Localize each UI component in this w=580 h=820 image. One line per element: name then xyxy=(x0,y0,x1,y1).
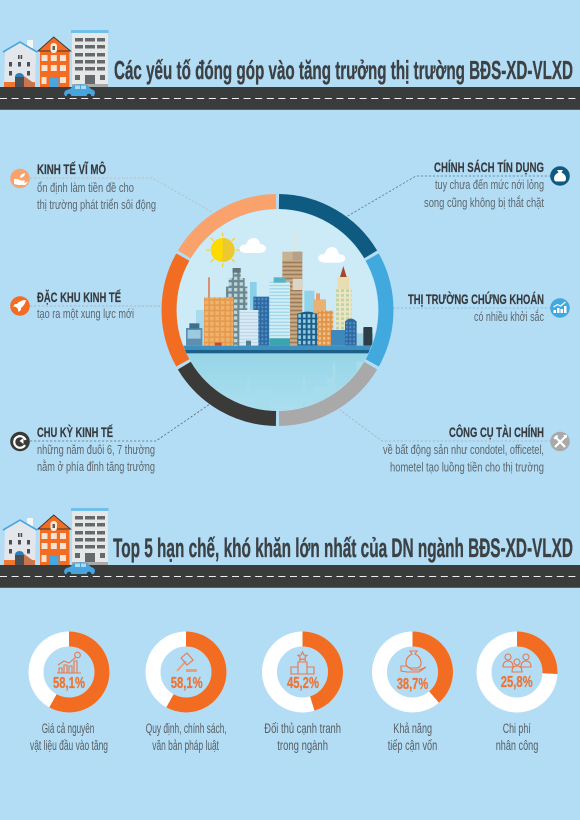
block: Thị trường chứng khoán: có nhiều khởi sắc xyxy=(474,309,544,324)
block: Thị trường chứng khoán xyxy=(408,292,544,324)
caption 3: trong ngành xyxy=(277,738,328,753)
blue building xyxy=(253,297,269,346)
icon: rocket xyxy=(10,296,30,316)
caption 2: Quy định, chính sách, xyxy=(146,721,227,736)
icon: chart with coin xyxy=(57,652,81,673)
block: Chu kỳ kinh tế: CHU KỲ KINH TẾ xyxy=(37,425,113,440)
caption 5 xyxy=(496,721,538,753)
icon: podium xyxy=(291,652,314,674)
caption 2: văn bản pháp luật xyxy=(152,738,219,753)
icon: gavel xyxy=(177,653,197,672)
caption 5: Chi phí xyxy=(503,721,531,736)
ring segment: bottom right xyxy=(279,366,371,418)
block: Đặc khu kinh tế xyxy=(37,290,134,321)
caption 4 xyxy=(388,721,437,753)
caption 4: Khả năng xyxy=(393,721,432,736)
back buildings xyxy=(196,230,373,346)
ring segment: left xyxy=(169,257,183,363)
block: Công cụ tài chính xyxy=(383,425,544,474)
block: Chu kỳ kinh tế: nằm ở phía đỉnh tăng trưởng xyxy=(37,459,155,474)
ring segment: top left xyxy=(184,202,276,254)
block: Kinh tế vĩ mô: ổn định làm tiền đề cho xyxy=(37,180,134,195)
block: Kinh tế vĩ mô: thị trường phát triển sôi động xyxy=(37,197,156,212)
block: Kinh tế vĩ mô xyxy=(37,162,156,212)
clouds xyxy=(239,238,345,263)
icon: cycle arrow xyxy=(10,432,30,451)
icon: hand with plant xyxy=(10,169,30,188)
block: Chính sách tín dụng xyxy=(424,160,544,210)
donut: 25,8% labour cost xyxy=(484,639,550,705)
caption 3 xyxy=(264,721,341,753)
caption 1: vật liệu đầu vào tăng xyxy=(30,738,108,753)
water and reflection xyxy=(186,352,369,410)
donut: 25,8% labour cost: 25,8% xyxy=(501,674,533,691)
ring segment: bottom left xyxy=(184,366,276,418)
left small building xyxy=(186,323,202,346)
gray tower xyxy=(226,268,247,346)
caption 4: tiếp cận vốn xyxy=(388,738,437,753)
quay xyxy=(180,346,380,353)
icon: money bag xyxy=(550,166,570,186)
ring segment: right xyxy=(372,257,386,363)
donut: 38,7% access to capital: 38,7% xyxy=(397,676,428,693)
connector lines xyxy=(30,176,551,441)
dark blue building xyxy=(297,312,318,346)
central city illustration xyxy=(173,209,383,415)
caption 1 xyxy=(30,721,108,753)
icon: growth chart xyxy=(550,298,570,318)
teal glass tower xyxy=(269,277,290,346)
donut: 45,2% competitors: 45,2% xyxy=(287,675,319,692)
cream tower xyxy=(335,266,352,330)
block: Đặc khu kinh tế: tạo ra một xung lực mới xyxy=(37,306,134,321)
block: Chu kỳ kinh tế: những năm đuôi 6, 7 thường xyxy=(37,442,155,457)
block: Đặc khu kinh tế: ĐẶC KHU KINH TẾ xyxy=(37,290,121,305)
donut: 58,1% regulations: 58,1% xyxy=(171,675,203,692)
block: Kinh tế vĩ mô: KINH TẾ VĨ MÔ xyxy=(37,162,106,177)
donut: 38,7% access to capital xyxy=(380,639,446,705)
donut: 58,1% regulations xyxy=(153,639,219,705)
caption 1: Giá cả nguyên xyxy=(42,721,94,736)
block: Chu kỳ kinh tế xyxy=(37,425,155,474)
sun xyxy=(206,233,240,267)
icon: money bag in hand xyxy=(401,651,426,672)
icon: tools xyxy=(550,432,570,451)
pale building xyxy=(239,310,258,346)
city disk background xyxy=(177,209,378,411)
icon: workers xyxy=(503,654,531,672)
street scene: houses, road and car (top) xyxy=(0,30,580,110)
right blue buildings xyxy=(331,318,372,346)
ring segment: top right xyxy=(279,202,371,254)
donut: 58,1% raw material prices xyxy=(36,639,102,705)
donut: 45,2% competitors xyxy=(270,639,336,705)
caption 3: Đối thủ cạnh tranh xyxy=(264,721,341,736)
caption 5: nhân công xyxy=(496,738,538,753)
small orange buildings xyxy=(313,293,333,346)
street scene: houses, road and car (bottom) xyxy=(0,508,580,588)
caption 2 xyxy=(146,721,227,753)
tan tower xyxy=(282,252,302,346)
orange building xyxy=(204,297,233,346)
donut: 58,1% raw material prices: 58,1% xyxy=(53,675,85,692)
